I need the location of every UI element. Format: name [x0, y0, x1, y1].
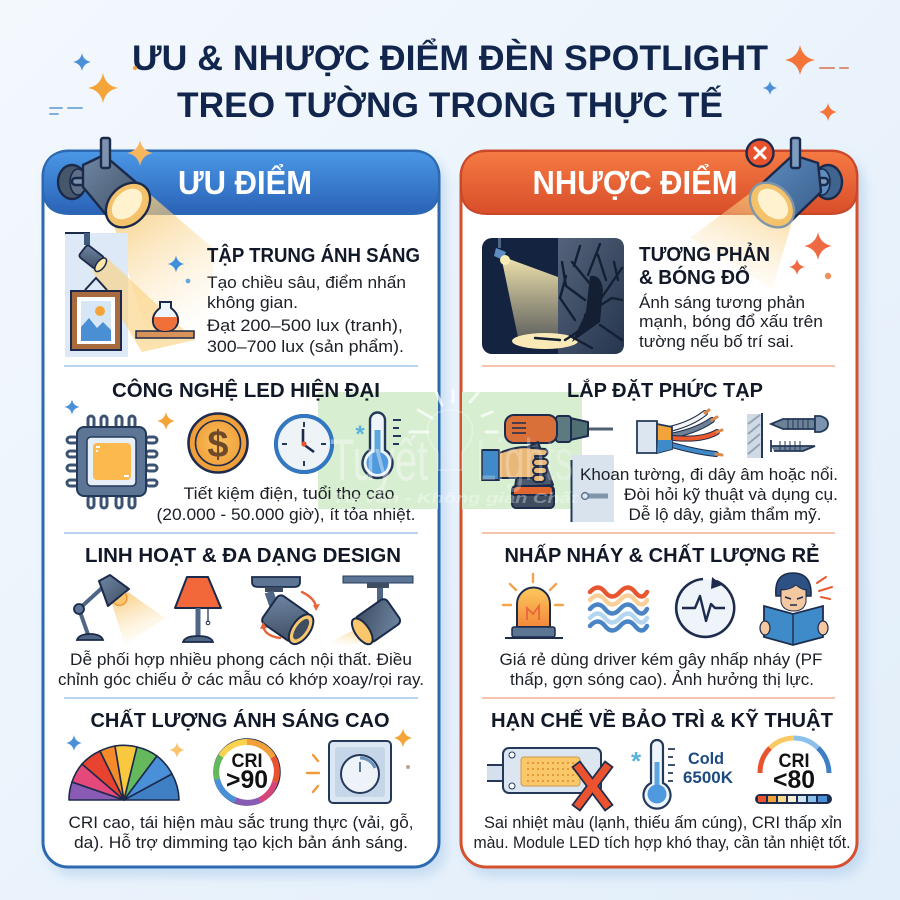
- text: tập trung ánh sáng: Đạt 200–500 lux (tranh),: [207, 316, 403, 335]
- icon: ripple waves: [590, 588, 647, 630]
- text: tập trung ánh sáng: TẬP TRUNG ÁNH SÁNG: [207, 243, 420, 267]
- label: cold 6500k: Cold: [688, 749, 724, 768]
- sparkles: fan: [66, 735, 184, 758]
- decorative stars: top right: [763, 45, 848, 121]
- text: lắp đặt phức tạp: Dễ lộ dây, giảm thẩm mỹ.: [628, 505, 822, 524]
- icon: dimmer switch: [307, 741, 391, 803]
- label: cold 6500k: [683, 749, 734, 787]
- icon: coin: $: [207, 424, 229, 466]
- text: công nghệ led: [156, 484, 416, 524]
- heading: lắp đặt phức tạp: LẮP ĐẶT PHỨC TẠP: [567, 378, 763, 402]
- image: harsh shadow on wall: [482, 238, 624, 354]
- light beam: right header spotlight: [690, 188, 792, 290]
- heading: hạn chế bảo trì: HẠN CHẾ VỀ BẢO TRÌ & KỸ THUẬT: [491, 708, 833, 732]
- panel header: nhược điểm: [461, 151, 857, 214]
- icon: cri 90 badge: CRI: [232, 751, 262, 772]
- light beam: left header spotlight: [113, 190, 215, 345]
- text: linh hoạt: [58, 650, 424, 689]
- icon: cold thermometer: *: [631, 746, 642, 776]
- text: tập trung ánh sáng: [207, 243, 420, 356]
- heading: nhấp nháy: NHẤP NHÁY & CHẤT LƯỢNG RẺ: [504, 544, 820, 567]
- icon: person reading: [760, 573, 832, 645]
- icon: table lamp: [175, 577, 221, 642]
- text: tương phản và bóng đổ: [639, 243, 823, 351]
- text: nhấp nháy: Giá rẻ dùng driver kém gây nhấp nháy (PF: [500, 650, 822, 669]
- icon: right header spotlight: [741, 138, 842, 236]
- title: TREO TƯỜNG TRONG THỰC TẾ: [177, 85, 723, 125]
- text: chất lượng ánh sáng: [68, 813, 414, 852]
- text: tương phản và bóng đổ: TƯƠNG PHẢN: [639, 243, 770, 266]
- sparkles: beside focus icon: [168, 256, 190, 283]
- heading: chất lượng ánh sáng: CHẤT LƯỢNG ÁNH SÁNG CAO: [90, 709, 390, 732]
- icon: coin: [188, 414, 248, 472]
- icon: power drill in hand: [482, 415, 613, 508]
- label: cold 6500k: 6500K: [683, 768, 734, 787]
- text: hạn chế bảo trì: Sai nhiệt màu (lạnh, thiếu ấm cúng), CRI thấp xỉn: [484, 813, 842, 832]
- icon: warning beacon: [503, 574, 563, 638]
- text: lắp đặt phức tạp: [580, 465, 838, 524]
- icon: wall and screws: [747, 413, 828, 458]
- heading: linh hoạt: LINH HOẠT & ĐA DẠNG DESIGN: [85, 545, 401, 567]
- text: nhấp nháy: thấp, gợn sóng cao). Ảnh hưởng thị lực.: [510, 670, 814, 689]
- text: lắp đặt phức tạp: Khoan tường, đi dây âm hoặc nổi.: [580, 465, 838, 484]
- icon: cold thermometer: [631, 740, 675, 809]
- icon: color fan: [69, 745, 179, 800]
- icon: broken led module: [487, 748, 606, 804]
- watermark: tuyết lights: Tư vấn - Không gian Chất: [332, 490, 579, 507]
- sparkles: near shadow text: [789, 232, 832, 279]
- icon: flicker waveform: [674, 577, 734, 637]
- text: công nghệ led: Tiết kiệm điện, tuổi thọ cao: [184, 484, 394, 503]
- panel header: nhược điểm: NHƯỢC ĐIỂM: [532, 164, 738, 201]
- text: linh hoạt: Dễ phối hợp nhiều phong cách nội thất. Điều: [70, 650, 412, 669]
- decorative stars: top left: [50, 53, 137, 114]
- icon: cri below 80 gauge: <80: [773, 766, 815, 794]
- icon: clock: [274, 414, 334, 474]
- icon: thermometer: [355, 413, 401, 478]
- text: tương phản và bóng đổ: tường nếu bố trí sai.: [639, 332, 794, 351]
- icon: cri 90 badge: >90: [226, 766, 268, 794]
- panel: ưu điểm: [43, 138, 446, 876]
- panel header: ưu điểm: ƯU ĐIỂM: [178, 164, 312, 201]
- text: tương phản và bóng đổ: Ánh sáng tương phản: [639, 293, 805, 312]
- text: nhấp nháy: [500, 650, 822, 689]
- icon: led chip: [67, 416, 157, 508]
- text: hạn chế bảo trì: [474, 813, 850, 852]
- icon: cri below 80 gauge: CRI: [778, 751, 810, 772]
- text: hạn chế bảo trì: màu. Module LED tích hợp khó thay, cần tản nhiệt tốt.: [474, 833, 850, 852]
- sparkles: led chip: [64, 400, 175, 430]
- icon: electrical cable: [637, 410, 722, 455]
- icon: cri below 80 gauge: [755, 738, 832, 804]
- icon: adjustable spotlight: [252, 577, 320, 648]
- panel header: ưu điểm: [43, 151, 439, 214]
- watermark: tuyết lights: [330, 390, 579, 507]
- text: tập trung ánh sáng: 300–700 lux (sản phẩm).: [207, 337, 404, 356]
- icon: picture and vase lit by spotlight: [65, 233, 195, 357]
- panel: wall anchor: [571, 455, 614, 522]
- text: lắp đặt phức tạp: Đòi hỏi kỹ thuật và dụng cụ.: [624, 485, 838, 504]
- icon: left header spotlight: [58, 138, 159, 236]
- icon: cri 90 badge: [214, 739, 280, 805]
- text: chất lượng ánh sáng: CRI cao, tái hiện màu sắc trung thực (vải, gỗ,: [68, 813, 414, 832]
- text: tương phản và bóng đổ: mạnh, bóng đổ xấu trên: [639, 312, 823, 331]
- text: linh hoạt: chỉnh góc chiếu ở các mẫu có khớp xoay/rọi ray.: [58, 670, 424, 689]
- watermark: tuyết lights: Lights: [476, 428, 573, 493]
- heading: công nghệ led: CÔNG NGHỆ LED HIỆN ĐẠI: [112, 378, 380, 402]
- text: tập trung ánh sáng: Tạo chiều sâu, điểm nhấn: [207, 273, 406, 292]
- sparkle: left header: [127, 140, 153, 166]
- watermark: tuyết lights: Tuyết: [330, 428, 428, 493]
- text: tập trung ánh sáng: không gian.: [207, 293, 298, 312]
- panel: nhược điểm: [461, 138, 864, 876]
- icon: thermometer: *: [355, 421, 365, 448]
- text: chất lượng ánh sáng: da). Hỗ trợ dimming tạo kịch bản ánh sáng.: [74, 833, 408, 852]
- icon: desk lamp: [74, 575, 165, 645]
- text: tương phản và bóng đổ: & BÓNG ĐỔ: [639, 265, 750, 289]
- title: [132, 38, 768, 125]
- badge: x mark: [746, 140, 774, 166]
- sparkles: dimmer: [394, 728, 412, 769]
- icon: track spotlight: [330, 576, 413, 648]
- text: công nghệ led: (20.000 - 50.000 giờ), ít tỏa nhiệt.: [156, 505, 416, 524]
- title: ƯU & NHƯỢC ĐIỂM ĐÈN SPOTLIGHT: [132, 38, 768, 78]
